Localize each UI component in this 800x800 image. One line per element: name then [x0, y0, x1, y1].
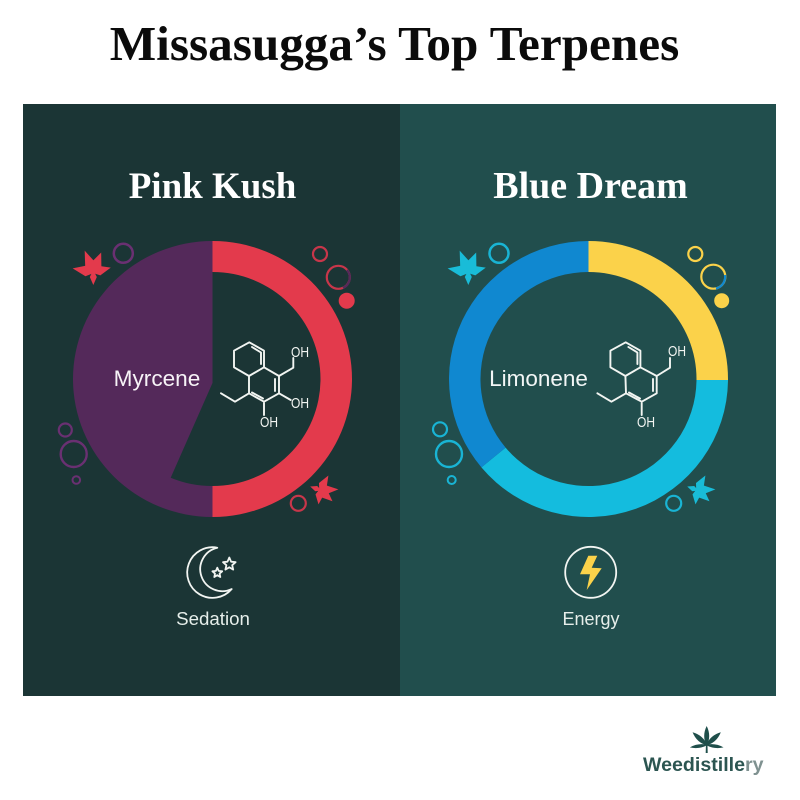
segment: red ring — [212, 241, 352, 517]
label: Sedation: Sedation — [176, 608, 250, 629]
panel: Blue Dream — [400, 104, 776, 696]
decoration: bubbles — [433, 244, 729, 511]
heading: Blue Dream: Blue Dream — [493, 165, 688, 207]
heading: Pink Kush: Pink Kush — [129, 166, 297, 207]
decoration: leaf bottom right — [682, 470, 721, 510]
label: Limonene: Limonene — [489, 366, 588, 391]
segment: Myrcene purple — [73, 241, 213, 517]
logo: Weedistillery — [643, 726, 764, 776]
logo: Weedistillery: Weedistillery — [643, 754, 764, 776]
panel: Pink Kush — [23, 104, 400, 696]
segment: yellow — [588, 241, 728, 380]
decoration: bubbles — [59, 244, 355, 511]
icon: lightning bolt in circle — [565, 547, 616, 598]
chart: Blue Dream terpene donut — [449, 241, 728, 517]
icon: molecule with three OH groups: OH — [291, 345, 309, 361]
chart: Pink Kush terpene donut — [73, 241, 352, 517]
decoration: leaf top left — [447, 249, 487, 285]
icon: molecule with three OH groups: OH — [291, 396, 309, 412]
title: Missasugga’s Top Terpenes — [110, 16, 679, 71]
icon: molecule with two OH groups — [597, 342, 686, 431]
icon: molecule with three OH groups — [221, 342, 309, 431]
segment: cyan — [481, 380, 728, 517]
label: Myrcene: Myrcene — [114, 366, 200, 391]
icon: molecule with two OH groups: OH — [668, 344, 686, 360]
icon: molecule with three OH groups: OH — [260, 415, 278, 431]
icon: crescent moon and stars — [187, 547, 236, 598]
decoration: leaf bottom right — [305, 470, 344, 510]
decoration: leaf top left — [72, 249, 112, 285]
label: Energy: Energy — [562, 609, 620, 629]
segment: blue — [449, 241, 588, 467]
icon: molecule with two OH groups: OH — [637, 415, 655, 431]
